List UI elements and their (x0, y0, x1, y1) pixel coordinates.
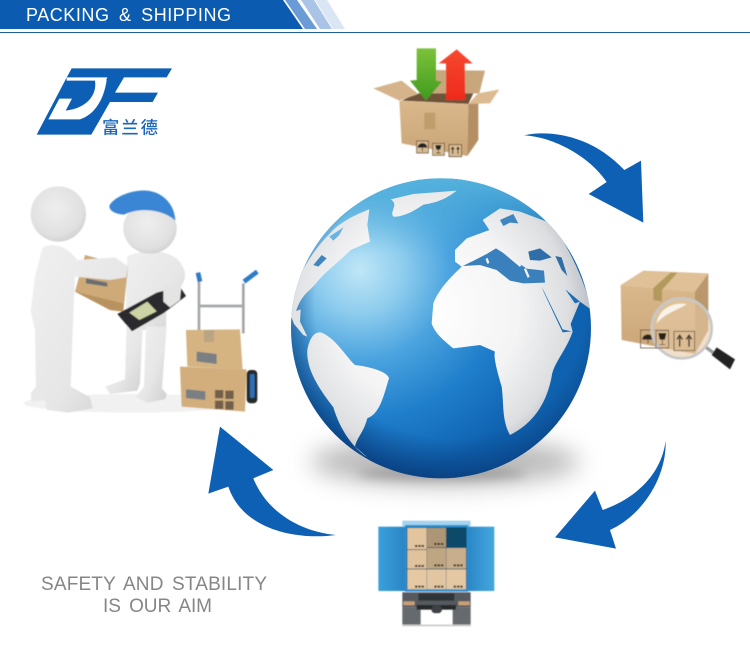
continent: greenland (391, 191, 457, 217)
carried parcel (75, 255, 128, 312)
icon: open box with arrows (373, 48, 499, 157)
truck chassis (402, 592, 471, 626)
hand truck (198, 272, 257, 403)
cargo boxes (407, 528, 466, 589)
left figure (31, 186, 128, 413)
globe (290, 178, 592, 478)
arrow: bottom left (208, 427, 336, 536)
caption: safety and stability: IS OUR AIM (103, 596, 212, 617)
magnifier (652, 298, 735, 369)
heading: packing and shipping: PACKING & SHIPPING (26, 5, 231, 25)
logo chinese name: 富兰德 (102, 118, 158, 138)
arrow: top right (524, 133, 643, 223)
floor shadow (23, 394, 243, 413)
continent: africa and eurasia (432, 208, 592, 435)
arrow: bottom right (555, 441, 666, 549)
header banner (0, 0, 750, 33)
blue cap (109, 191, 175, 221)
right figure (105, 191, 185, 403)
globe shadow (310, 438, 580, 486)
icon: open truck (378, 521, 494, 626)
continent: south america (307, 332, 389, 457)
illustration: two figures exchanging a parcel (23, 186, 257, 413)
handheld scanner (117, 283, 186, 331)
seas (463, 248, 545, 283)
icon: box with magnifier (621, 271, 735, 369)
caption: safety and stability: SAFETY AND STABILITY (41, 574, 267, 595)
continent: north america (290, 209, 370, 313)
caption: safety and stability (41, 574, 267, 617)
stacked boxes (180, 329, 247, 412)
logo: DF (37, 68, 172, 138)
